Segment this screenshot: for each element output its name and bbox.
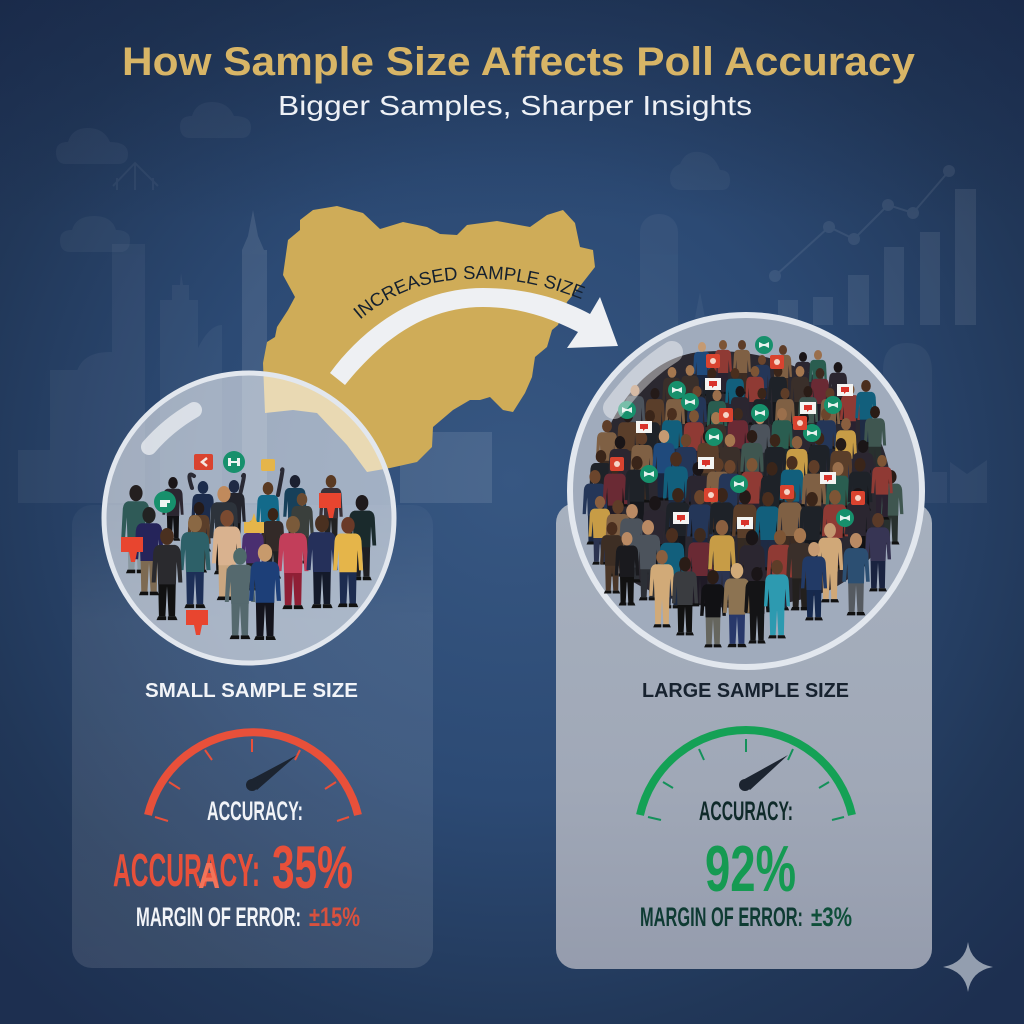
small sample accuracy value: A — [198, 855, 220, 896]
small sample gauge — [148, 732, 358, 821]
lens highlight — [149, 410, 194, 447]
large sample heading: LARGE SAMPLE SIZE — [642, 680, 849, 702]
lens circle — [104, 373, 394, 663]
large sample margin of error: MARGIN OF ERROR: — [640, 902, 803, 932]
sparkle star — [943, 942, 993, 992]
background skyline, clouds and chart — [18, 102, 987, 503]
large sample accuracy value: 92% — [705, 832, 796, 905]
small crowd — [121, 469, 376, 640]
small sample accuracy value — [113, 834, 353, 901]
small sample heading: SMALL SAMPLE SIZE — [145, 680, 358, 702]
large sample margin of error: ±3% — [811, 902, 852, 932]
large crowd — [583, 340, 903, 647]
large lens highlight — [614, 352, 672, 408]
small sample accuracy value: 35% — [272, 834, 353, 901]
subtitle: Bigger Samples, Sharper Insights — [278, 90, 752, 121]
map of Nigeria — [263, 206, 595, 472]
large crowd reaction icons — [610, 336, 865, 529]
panel: large sample — [556, 503, 932, 969]
small sample margin of error: ±15% — [309, 902, 360, 932]
arrow label path — [360, 279, 606, 320]
small crowd reaction icons — [121, 451, 341, 635]
small sample margin of error: MARGIN OF ERROR: — [136, 902, 301, 932]
small sample lens — [104, 373, 394, 663]
title: How Sample Size Affects Poll Accuracy — [122, 40, 916, 84]
large sample lens — [570, 315, 922, 667]
small sample accuracy label: ACCURACY: — [207, 796, 303, 826]
arrow label: INCREASED SAMPLE SIZE — [353, 266, 586, 319]
arrow: increased sample size — [330, 288, 618, 385]
large sample accuracy label: ACCURACY: — [699, 796, 793, 826]
small sample accuracy value: ACCURACY: — [113, 844, 260, 896]
panel: small sample — [72, 505, 433, 968]
large sample gauge — [640, 730, 852, 820]
top shading — [0, 0, 1024, 220]
